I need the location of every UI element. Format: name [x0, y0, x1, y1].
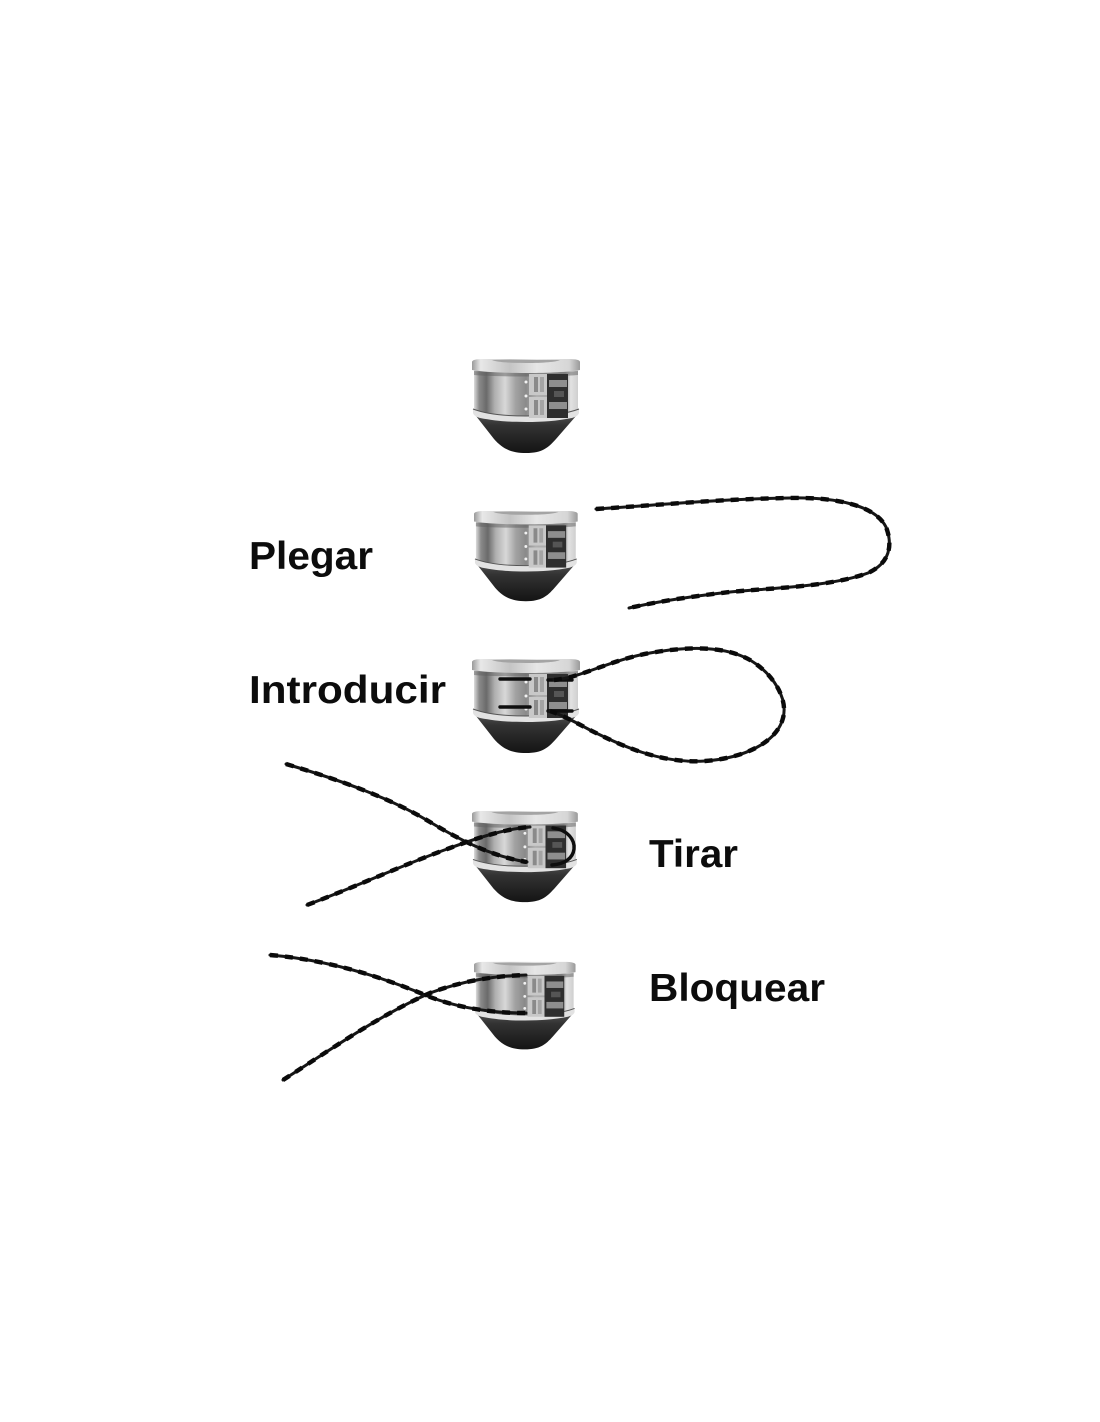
icon: trimmer head with wire pulled through: [286, 764, 578, 905]
step 3: Tirar: [286, 764, 738, 905]
label: Tirar: Tirar: [649, 833, 738, 876]
label: Introducir: Introducir: [249, 669, 446, 712]
icon: trimmer head with wire inserted: [472, 648, 784, 761]
step 0: bare trimmer head: [472, 359, 580, 453]
label: Bloquear: Bloquear: [649, 967, 825, 1010]
step 1: Plegar: [249, 498, 889, 608]
step 4: Bloquear: [270, 955, 825, 1080]
icon: trimmer head with folded wire: [474, 498, 889, 608]
label: Plegar: Plegar: [249, 535, 373, 578]
icon: trimmer head with wire locked: [270, 955, 576, 1080]
step 2: Introducir: [249, 648, 784, 761]
